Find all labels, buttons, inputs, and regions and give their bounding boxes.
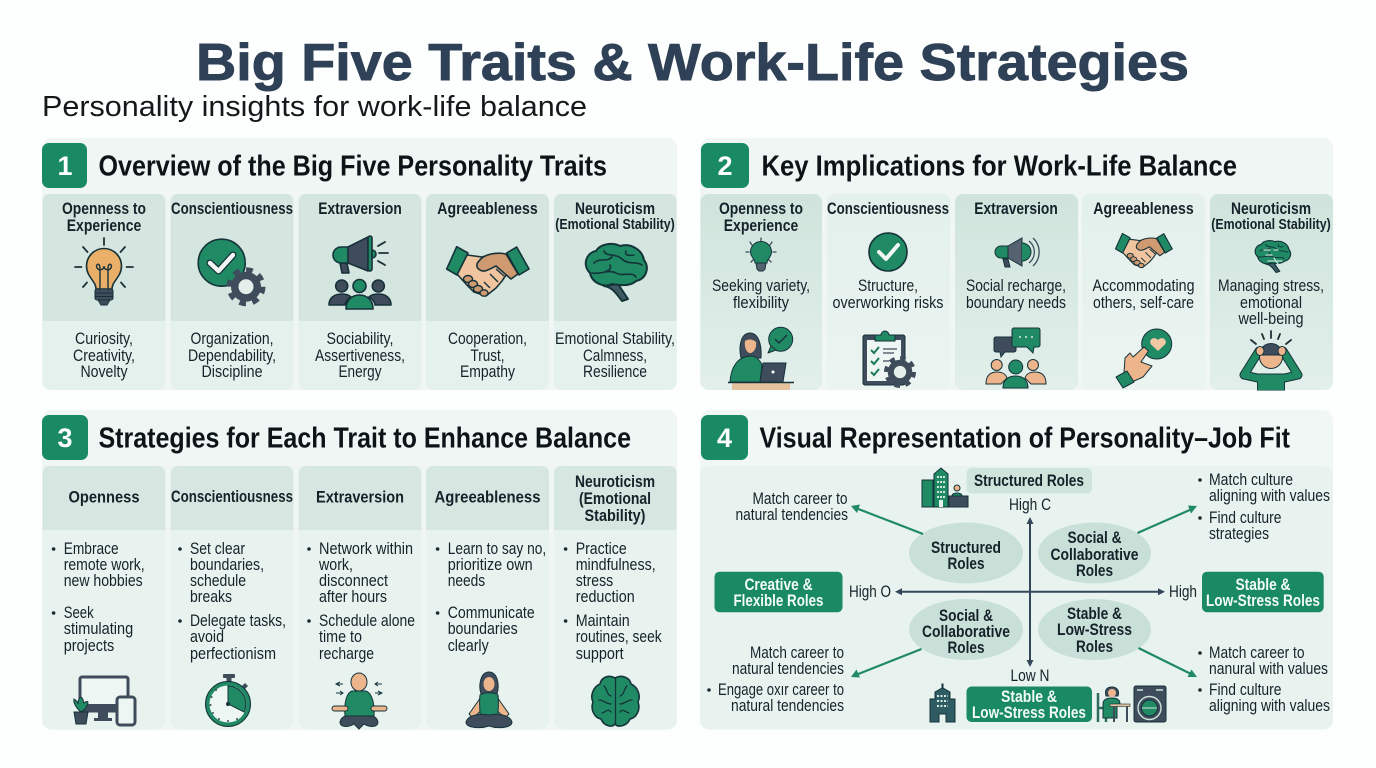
- arrow: bottom right: [1138, 648, 1197, 677]
- note: bottom right: [1198, 644, 1330, 715]
- card: neuroticism strategies: Stability): [584, 507, 646, 525]
- axis label: high C: High C: [1009, 496, 1051, 514]
- text: implication: overworking risks: [832, 294, 944, 312]
- text: traits: Calmness,: [583, 347, 647, 365]
- axis label: high O: High O: [849, 583, 891, 601]
- note: bottom left: Match career to: [750, 644, 844, 662]
- card: neuroticism implication: Neuroticism: [1231, 200, 1311, 218]
- text: traits: [188, 330, 276, 381]
- text: implication: emotional: [1240, 294, 1302, 312]
- arrow: top right: [1138, 506, 1197, 533]
- text: traits: [555, 330, 675, 381]
- note: bottom left: [707, 644, 844, 715]
- strategy bullets: perfectionism: [190, 645, 276, 663]
- icon: computer devices and plant: [74, 677, 135, 725]
- strategy bullets: boundaries: [448, 620, 518, 638]
- role bubble: stable bottom right: Roles: [1076, 638, 1113, 656]
- panel: overview of the big five traits: [42, 138, 677, 390]
- label: stable and low-stress roles right: Low-Stress Roles: [1206, 592, 1320, 610]
- strategy bullets: [52, 540, 145, 655]
- text: traits: Novelty: [80, 363, 128, 381]
- card: openness to experience: Openness to: [62, 200, 146, 218]
- strategy bullets: projects: [64, 637, 114, 655]
- text: implication: Managing stress,: [1218, 277, 1324, 295]
- icon: stressed person: [1244, 331, 1298, 390]
- card: neuroticism implication: [1210, 194, 1333, 390]
- card: conscientiousness implication: [827, 194, 950, 390]
- heading: overview: Overview of the Big Five Personality Traits: [98, 150, 607, 182]
- strategy bullets: [307, 540, 415, 663]
- card: agreeableness: [426, 194, 549, 390]
- note: bottom right: Match career to: [1209, 644, 1304, 662]
- icon: woman at laptop: [728, 327, 794, 390]
- note: bottom right: Find culture: [1209, 681, 1282, 699]
- strategy bullets: Seek: [64, 604, 94, 622]
- icon: check circle: [869, 233, 907, 271]
- label: creative and flexible roles: Creative &: [744, 576, 813, 594]
- text: traits: Discipline: [202, 363, 262, 381]
- icon: meditating woman: [466, 672, 512, 728]
- icon: small brain with circuits: [1255, 241, 1291, 272]
- card: neuroticism: Neuroticism: [575, 200, 655, 218]
- text: traits: Cooperation,: [448, 330, 527, 348]
- text: traits: Assertiveness,: [315, 347, 405, 365]
- note: bottom left: natural tendencies: [732, 660, 844, 678]
- strategy bullets: needs: [448, 572, 485, 590]
- text: traits: [73, 330, 135, 381]
- text: traits: Organization,: [190, 330, 274, 348]
- icon: stopwatch: [206, 674, 250, 726]
- strategy bullets: mindfulness,: [576, 556, 656, 574]
- section badge 3: 3: [57, 423, 73, 453]
- icon: small handshake: [1115, 233, 1172, 268]
- card: neuroticism: (Emotional Stability): [555, 216, 675, 233]
- strategy bullets: breaks: [190, 588, 232, 606]
- strategy bullets: Communicate: [448, 604, 535, 622]
- strategy bullets: avoid: [190, 628, 224, 646]
- note: top left: [736, 490, 848, 524]
- role bubble: structured: Roles: [948, 555, 984, 573]
- note: top right: Match culture: [1209, 471, 1293, 489]
- card: extraversion: Extraversion: [318, 200, 402, 218]
- card: extraversion: [298, 194, 422, 390]
- section badge 1: [42, 143, 87, 188]
- role bubble: stable bottom right: Low-Stress: [1057, 621, 1132, 639]
- text: traits: [448, 330, 527, 381]
- label: stable and low-stress roles right: [1202, 572, 1324, 612]
- arrow: top left: [851, 504, 923, 534]
- text: traits: Trust,: [470, 347, 504, 365]
- icon: handshake: [447, 247, 529, 296]
- card: openness strategies: Openness: [68, 488, 140, 506]
- role bubble: structured: Structured: [931, 539, 1001, 557]
- strategy bullets: work,: [318, 556, 353, 574]
- note: top left: natural tendencies: [736, 506, 848, 524]
- strategy bullets: clearly: [448, 637, 489, 655]
- note: top right: strategies: [1209, 525, 1269, 543]
- strategy bullets: [178, 540, 286, 663]
- icon: brain: [586, 244, 647, 301]
- text: traits: Dependability,: [188, 347, 276, 365]
- strategy bullets: schedule: [190, 572, 246, 590]
- strategy bullets: remote work,: [64, 556, 145, 574]
- card: openness implication: Openness to: [719, 200, 803, 218]
- icon: megaphone with sound: [995, 238, 1039, 267]
- role bubble: stable bottom right: [1038, 599, 1151, 660]
- note: top left: Match career to: [752, 490, 848, 508]
- panel: key implications: [700, 138, 1333, 390]
- card: openness implication: [700, 194, 822, 390]
- strategy bullets: disconnect: [319, 572, 388, 590]
- role bubble: social bottom left: [909, 599, 1023, 660]
- icon: brain top view: [592, 676, 639, 726]
- card: openness to experience: Experience: [67, 217, 141, 235]
- strategy bullets: prioritize own: [448, 556, 533, 574]
- strategy bullets: boundaries,: [190, 556, 264, 574]
- card: neuroticism strategies: Neuroticism: [575, 473, 655, 491]
- section badge 2: 2: [717, 151, 733, 181]
- text: implication: [712, 277, 810, 312]
- section badge 3: [42, 415, 88, 460]
- strategy bullets: new hobbies: [64, 572, 143, 590]
- card: neuroticism strategies: [554, 466, 676, 729]
- card: agreeableness: Agreeableness: [437, 200, 538, 218]
- card: extraversion strategies: [298, 466, 422, 729]
- axis label: high: High: [1169, 583, 1197, 601]
- note: top right: Find culture: [1209, 509, 1282, 527]
- icon: office building and receptionist: [922, 468, 968, 507]
- text: traits: Emotional Stability,: [555, 330, 675, 348]
- strategy bullets: stress: [576, 572, 613, 590]
- role bubble: social top right: Roles: [1076, 562, 1113, 580]
- card: extraversion strategies: Extraversion: [316, 488, 404, 506]
- icon: clipboard and gear: [863, 331, 914, 386]
- text: implication: Structure,: [858, 277, 918, 295]
- axes: [895, 517, 1165, 667]
- strategy bullets: Schedule alone: [319, 612, 415, 630]
- icon: hand and heart: [1116, 329, 1172, 388]
- strategy bullets: Practice: [576, 540, 627, 558]
- icon: apartment building: [930, 684, 955, 722]
- card: neuroticism strategies: (Emotional: [579, 490, 651, 508]
- card: conscientiousness implication: Conscientiousness: [827, 200, 949, 218]
- note: bottom right: aligning with values: [1209, 697, 1330, 715]
- strategy bullets: recharge: [319, 645, 374, 663]
- role bubble: social top right: Collaborative: [1050, 546, 1138, 564]
- strategy bullets: support: [576, 645, 624, 663]
- card: extraversion implication: Extraversion: [974, 200, 1058, 218]
- strategy bullets: stimulating: [64, 620, 133, 638]
- heading: strategies: Strategies for Each Trait to Enhance Balance: [98, 422, 631, 454]
- text: implication: [966, 277, 1066, 312]
- heading: key implications: Key Implications for Work-Life Balance: [762, 150, 1237, 182]
- role bubble: social bottom left: Collaborative: [922, 623, 1010, 641]
- role bubble: social top right: Social &: [1068, 529, 1122, 547]
- card: conscientiousness: [170, 194, 294, 390]
- label: stable and low-stress roles right: Stable &: [1236, 576, 1291, 594]
- panel: strategies for each trait: [42, 410, 677, 730]
- text: traits: Creativity,: [73, 347, 135, 365]
- panel: personality-job fit: [700, 410, 1333, 730]
- strategy bullets: after hours: [319, 588, 387, 606]
- section badge 4: 4: [717, 423, 732, 453]
- text: traits: Resilience: [583, 363, 647, 381]
- role bubble: structured: [909, 522, 1023, 584]
- note: bottom left: Engage oxır career to: [718, 681, 844, 699]
- strategy bullets: routines, seek: [576, 628, 662, 646]
- icon: check and gear: [198, 239, 263, 304]
- section badge 2: [701, 143, 749, 188]
- role bubble: stable bottom right: Stable &: [1067, 605, 1122, 623]
- strategy bullets: Set clear: [190, 540, 245, 558]
- heading: visual representation: Visual Representation of Personality–Job Fit: [760, 422, 1290, 454]
- strategy bullets: [436, 540, 546, 655]
- text: implication: boundary needs: [966, 294, 1066, 312]
- icon: small bulb: [746, 238, 776, 271]
- text: implication: Accommodating: [1092, 277, 1194, 295]
- text: traits: Curiosity,: [75, 330, 133, 348]
- card: conscientiousness strategies: Conscientiousness: [171, 488, 293, 506]
- label: creative and flexible roles: Flexible Roles: [734, 592, 824, 610]
- note: top right: aligning with values: [1209, 487, 1330, 505]
- role bubble: social bottom left: Social &: [939, 607, 993, 625]
- card: openness to experience: [42, 194, 166, 390]
- strategy bullets: Delegate tasks,: [190, 612, 286, 630]
- label: stable and low-stress roles bottom: Low-Stress Roles: [972, 704, 1086, 722]
- strategy bullets: Maintain: [576, 612, 630, 630]
- label: stable and low-stress roles bottom: Stable &: [1001, 688, 1057, 706]
- card: neuroticism: [554, 194, 676, 390]
- label: structured roles pill: [966, 468, 1092, 494]
- text: traits: Empathy: [460, 363, 516, 381]
- card: agreeableness implication: Agreeableness: [1093, 200, 1194, 218]
- text: implication: [832, 277, 944, 312]
- card: openness implication: Experience: [724, 217, 798, 235]
- arrow: bottom left: [851, 649, 922, 678]
- card: neuroticism implication: (Emotional Stability): [1211, 216, 1331, 233]
- icon: washing machine: [1134, 686, 1166, 722]
- text: implication: Seeking variety,: [712, 277, 810, 295]
- label: stable and low-stress roles bottom: [966, 686, 1092, 722]
- text: implication: well-being: [1238, 310, 1304, 328]
- icon: light bulb: [75, 238, 133, 305]
- section badge 4: [701, 415, 748, 460]
- icon: chat and people: [986, 328, 1046, 388]
- text: implication: Social recharge,: [966, 277, 1066, 295]
- card: agreeableness strategies: [426, 466, 549, 729]
- strategy bullets: Network within: [319, 540, 413, 558]
- card: conscientiousness: Conscientiousness: [171, 200, 293, 218]
- note: bottom right: nanural with values: [1209, 660, 1328, 678]
- card: agreeableness strategies: Agreeableness: [434, 488, 540, 506]
- icon: meditating man: [332, 673, 387, 729]
- text: implication: [1092, 277, 1194, 312]
- text: implication: others, self-care: [1093, 294, 1194, 312]
- note: top right: [1198, 471, 1330, 543]
- strategy bullets: time to: [319, 628, 362, 646]
- card: conscientiousness strategies: [170, 466, 294, 729]
- text: implication: [1218, 277, 1324, 328]
- role bubble: social top right: [1038, 522, 1151, 584]
- text: implication: flexibility: [733, 294, 790, 312]
- icon: megaphone and people: [329, 236, 391, 309]
- note: bottom left: natural tendencies: [731, 697, 844, 715]
- card: openness strategies: [42, 466, 166, 729]
- card: agreeableness implication: [1082, 194, 1205, 390]
- strategy bullets: [564, 540, 662, 663]
- text: traits: [315, 330, 405, 381]
- text: traits: Sociability,: [326, 330, 394, 348]
- card: extraversion implication: [955, 194, 1078, 390]
- title: Big Five Traits & Work-Life Strategies: [196, 34, 1189, 92]
- strategy bullets: reduction: [576, 588, 635, 606]
- axis label: low N: Low N: [1010, 667, 1050, 685]
- role bubble: social bottom left: Roles: [948, 639, 984, 657]
- label: structured roles pill: Structured Roles: [974, 472, 1084, 490]
- quadrant chart: [700, 466, 1333, 729]
- label: creative and flexible roles: [714, 572, 842, 612]
- section badge 1: 1: [57, 151, 73, 181]
- subtitle: Personality insights for work-life balance: [42, 91, 587, 123]
- text: traits: Energy: [338, 363, 382, 381]
- strategy bullets: Embrace: [64, 540, 119, 558]
- icon: person at desk: [1098, 687, 1130, 722]
- strategy bullets: Learn to say no,: [448, 540, 546, 558]
